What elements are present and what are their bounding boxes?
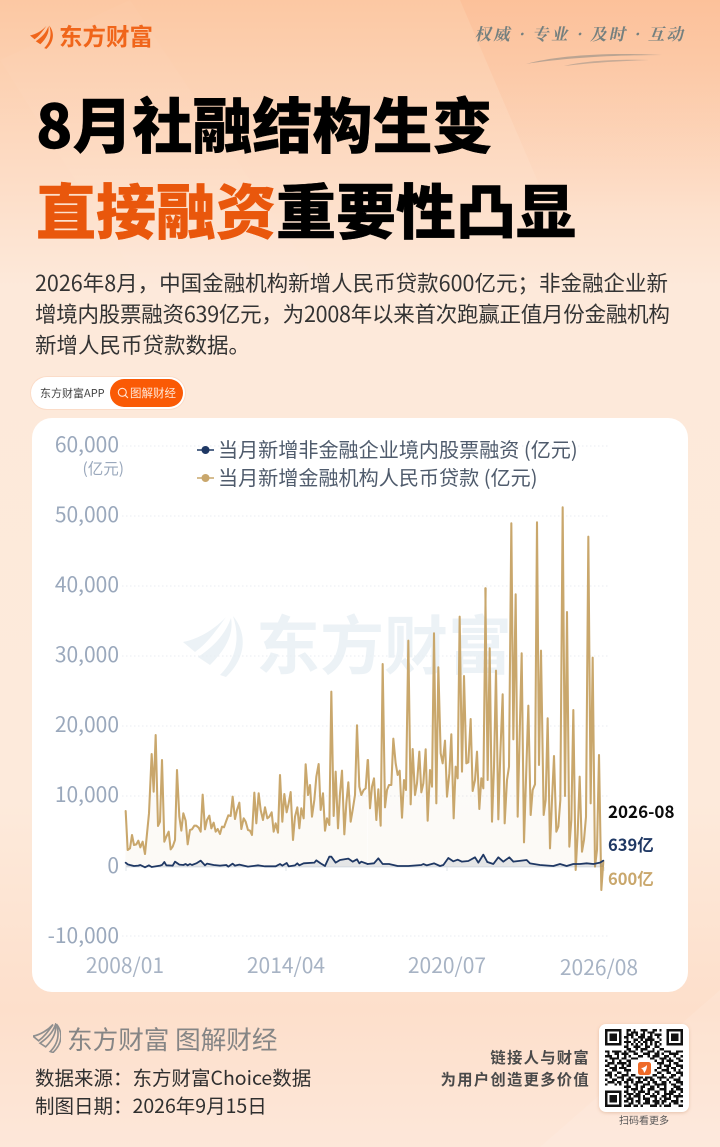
slogan text: 权威 · 专业 · 及时 · 互动 (473, 21, 689, 45)
end-point labels: 2026-08 (608, 798, 674, 823)
title line 2: 直接融资重要性凸显 (36, 165, 576, 252)
axis baseline (126, 867, 604, 871)
series: equity financing (126, 855, 603, 867)
source and date: 数据来源：东方财富Choice数据 (35, 1062, 311, 1091)
y axis labels: 0 (107, 850, 119, 880)
grid lines (122, 446, 608, 936)
legend: equity financing: 当月新增非金融企业境内股票融资 (亿元) (218, 434, 578, 463)
button label: 图解财经 (130, 385, 176, 401)
icon: magnifier (118, 388, 128, 398)
intro paragraph: 新增人民币贷款数据。 (35, 329, 250, 360)
x axis labels: 2026/08 (560, 952, 638, 982)
end-point labels: 600亿 (608, 866, 654, 890)
slogan (473, 21, 689, 66)
x axis labels: 2020/07 (408, 950, 486, 980)
y axis labels: 60,000 (55, 429, 119, 459)
x axis labels: 2014/04 (247, 950, 325, 980)
watermark: 东方财富 (256, 596, 512, 688)
icon: flame logo (30, 26, 53, 49)
footer brand (33, 1020, 277, 1057)
end-point labels: 639亿 (608, 832, 654, 856)
QR code card (598, 1024, 690, 1127)
y axis labels (48, 429, 119, 950)
y axis labels: 50,000 (55, 499, 119, 529)
brush swoosh (526, 54, 660, 66)
series: RMB loans (126, 507, 603, 890)
legend: RMB loans: 当月新增金融机构人民币贷款 (亿元) (218, 462, 538, 491)
y axis labels: 20,000 (55, 709, 119, 739)
panel: chart card (32, 418, 688, 992)
card background (599, 1024, 689, 1112)
tagline: 为用户创造更多价值 (441, 1068, 590, 1090)
title (36, 79, 576, 252)
y axis labels: -10,000 (48, 920, 119, 950)
footer brand text: 东方财富 图解财经 (67, 1020, 277, 1057)
intro paragraph: 2026年8月，中国金融机构新增人民币贷款600亿元；非金融企业新 (35, 267, 668, 298)
source and date: 制图日期：2026年9月15日 (35, 1090, 267, 1119)
y axis unit: (亿元) (83, 457, 124, 479)
QR caption: 扫码看更多 (619, 1112, 669, 1127)
icon: QR pattern (605, 1029, 683, 1107)
y axis labels: 10,000 (55, 779, 119, 809)
intro paragraph: 增境内股票融资639亿元，为2008年以来首次跑赢正值月份金融机构 (35, 298, 670, 329)
x axis labels: 2008/01 (86, 950, 164, 980)
search pill (31, 377, 185, 409)
brand logo (30, 18, 153, 52)
icon: QR centre logo (638, 1062, 651, 1075)
y axis labels: 40,000 (55, 569, 119, 599)
search button (110, 379, 183, 407)
intro paragraph (35, 267, 670, 360)
pill label: 东方财富APP (40, 385, 105, 401)
tagline (441, 1046, 590, 1090)
y axis labels: 30,000 (55, 639, 119, 669)
end-point labels (608, 798, 674, 890)
title line 1: 8月社融结构生变 (36, 79, 493, 166)
tagline: 链接人与财富 (490, 1046, 590, 1068)
brand name: 东方财富 (59, 18, 153, 52)
source and date (35, 1062, 311, 1119)
icon: outline logo (33, 1023, 61, 1053)
legend (197, 434, 578, 491)
x axis labels (86, 950, 638, 982)
